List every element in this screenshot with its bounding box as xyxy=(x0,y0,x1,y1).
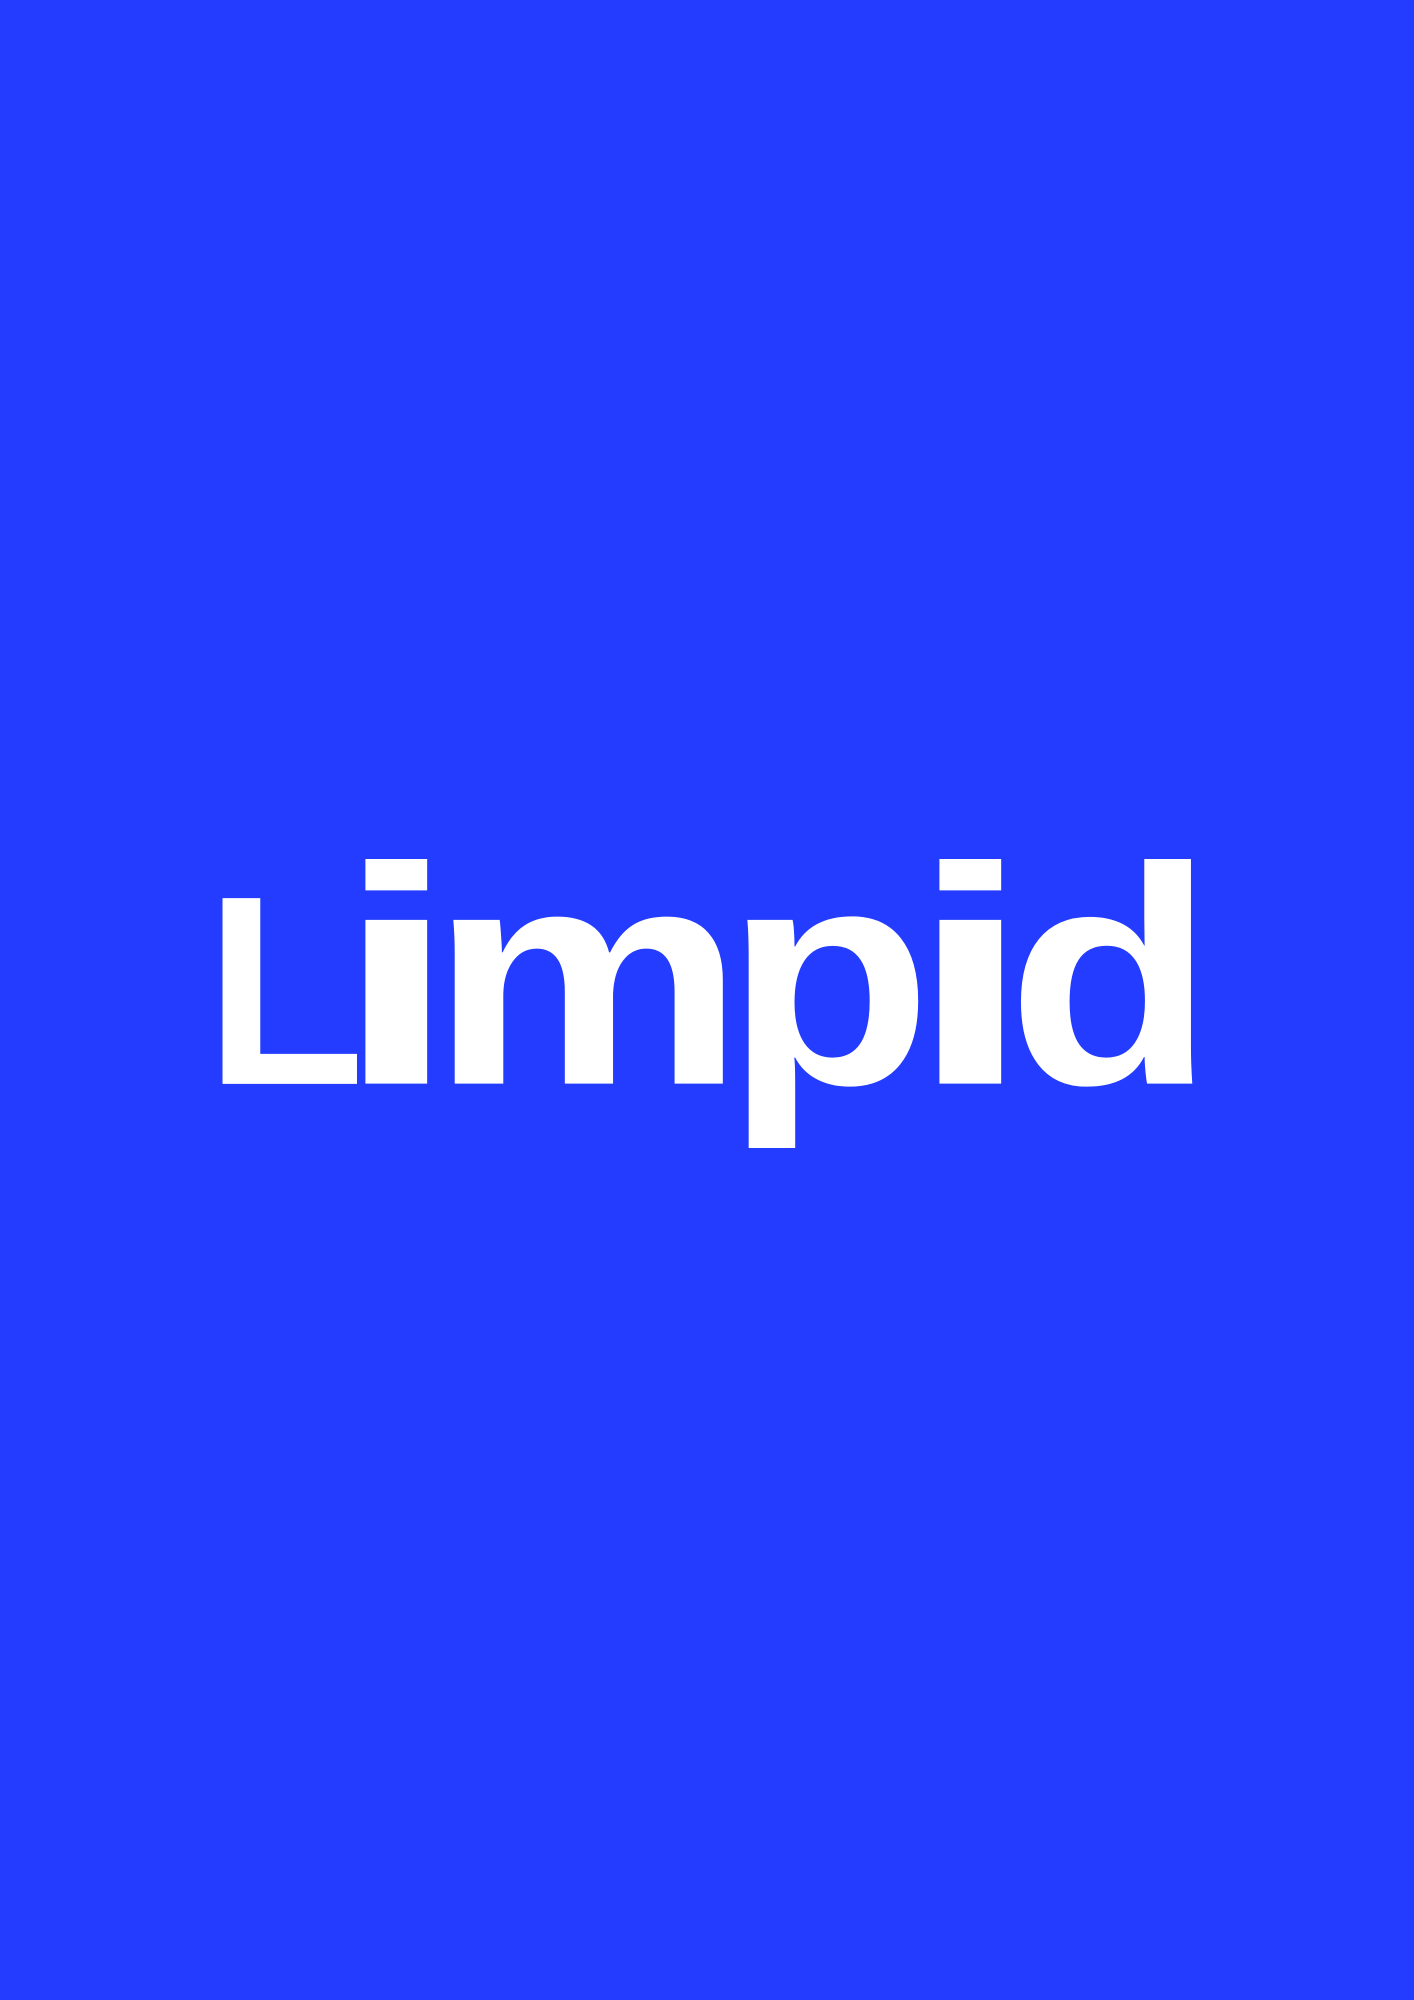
title: Limpid wordmark: m xyxy=(430,805,745,1152)
title: Limpid wordmark: i xyxy=(908,805,1033,1152)
title: Limpid wordmark: p xyxy=(725,805,932,1152)
title: Limpid wordmark: i xyxy=(334,805,459,1152)
title: Limpid wordmark: L xyxy=(205,841,365,1144)
title: Limpid wordmark: d xyxy=(1007,805,1215,1152)
